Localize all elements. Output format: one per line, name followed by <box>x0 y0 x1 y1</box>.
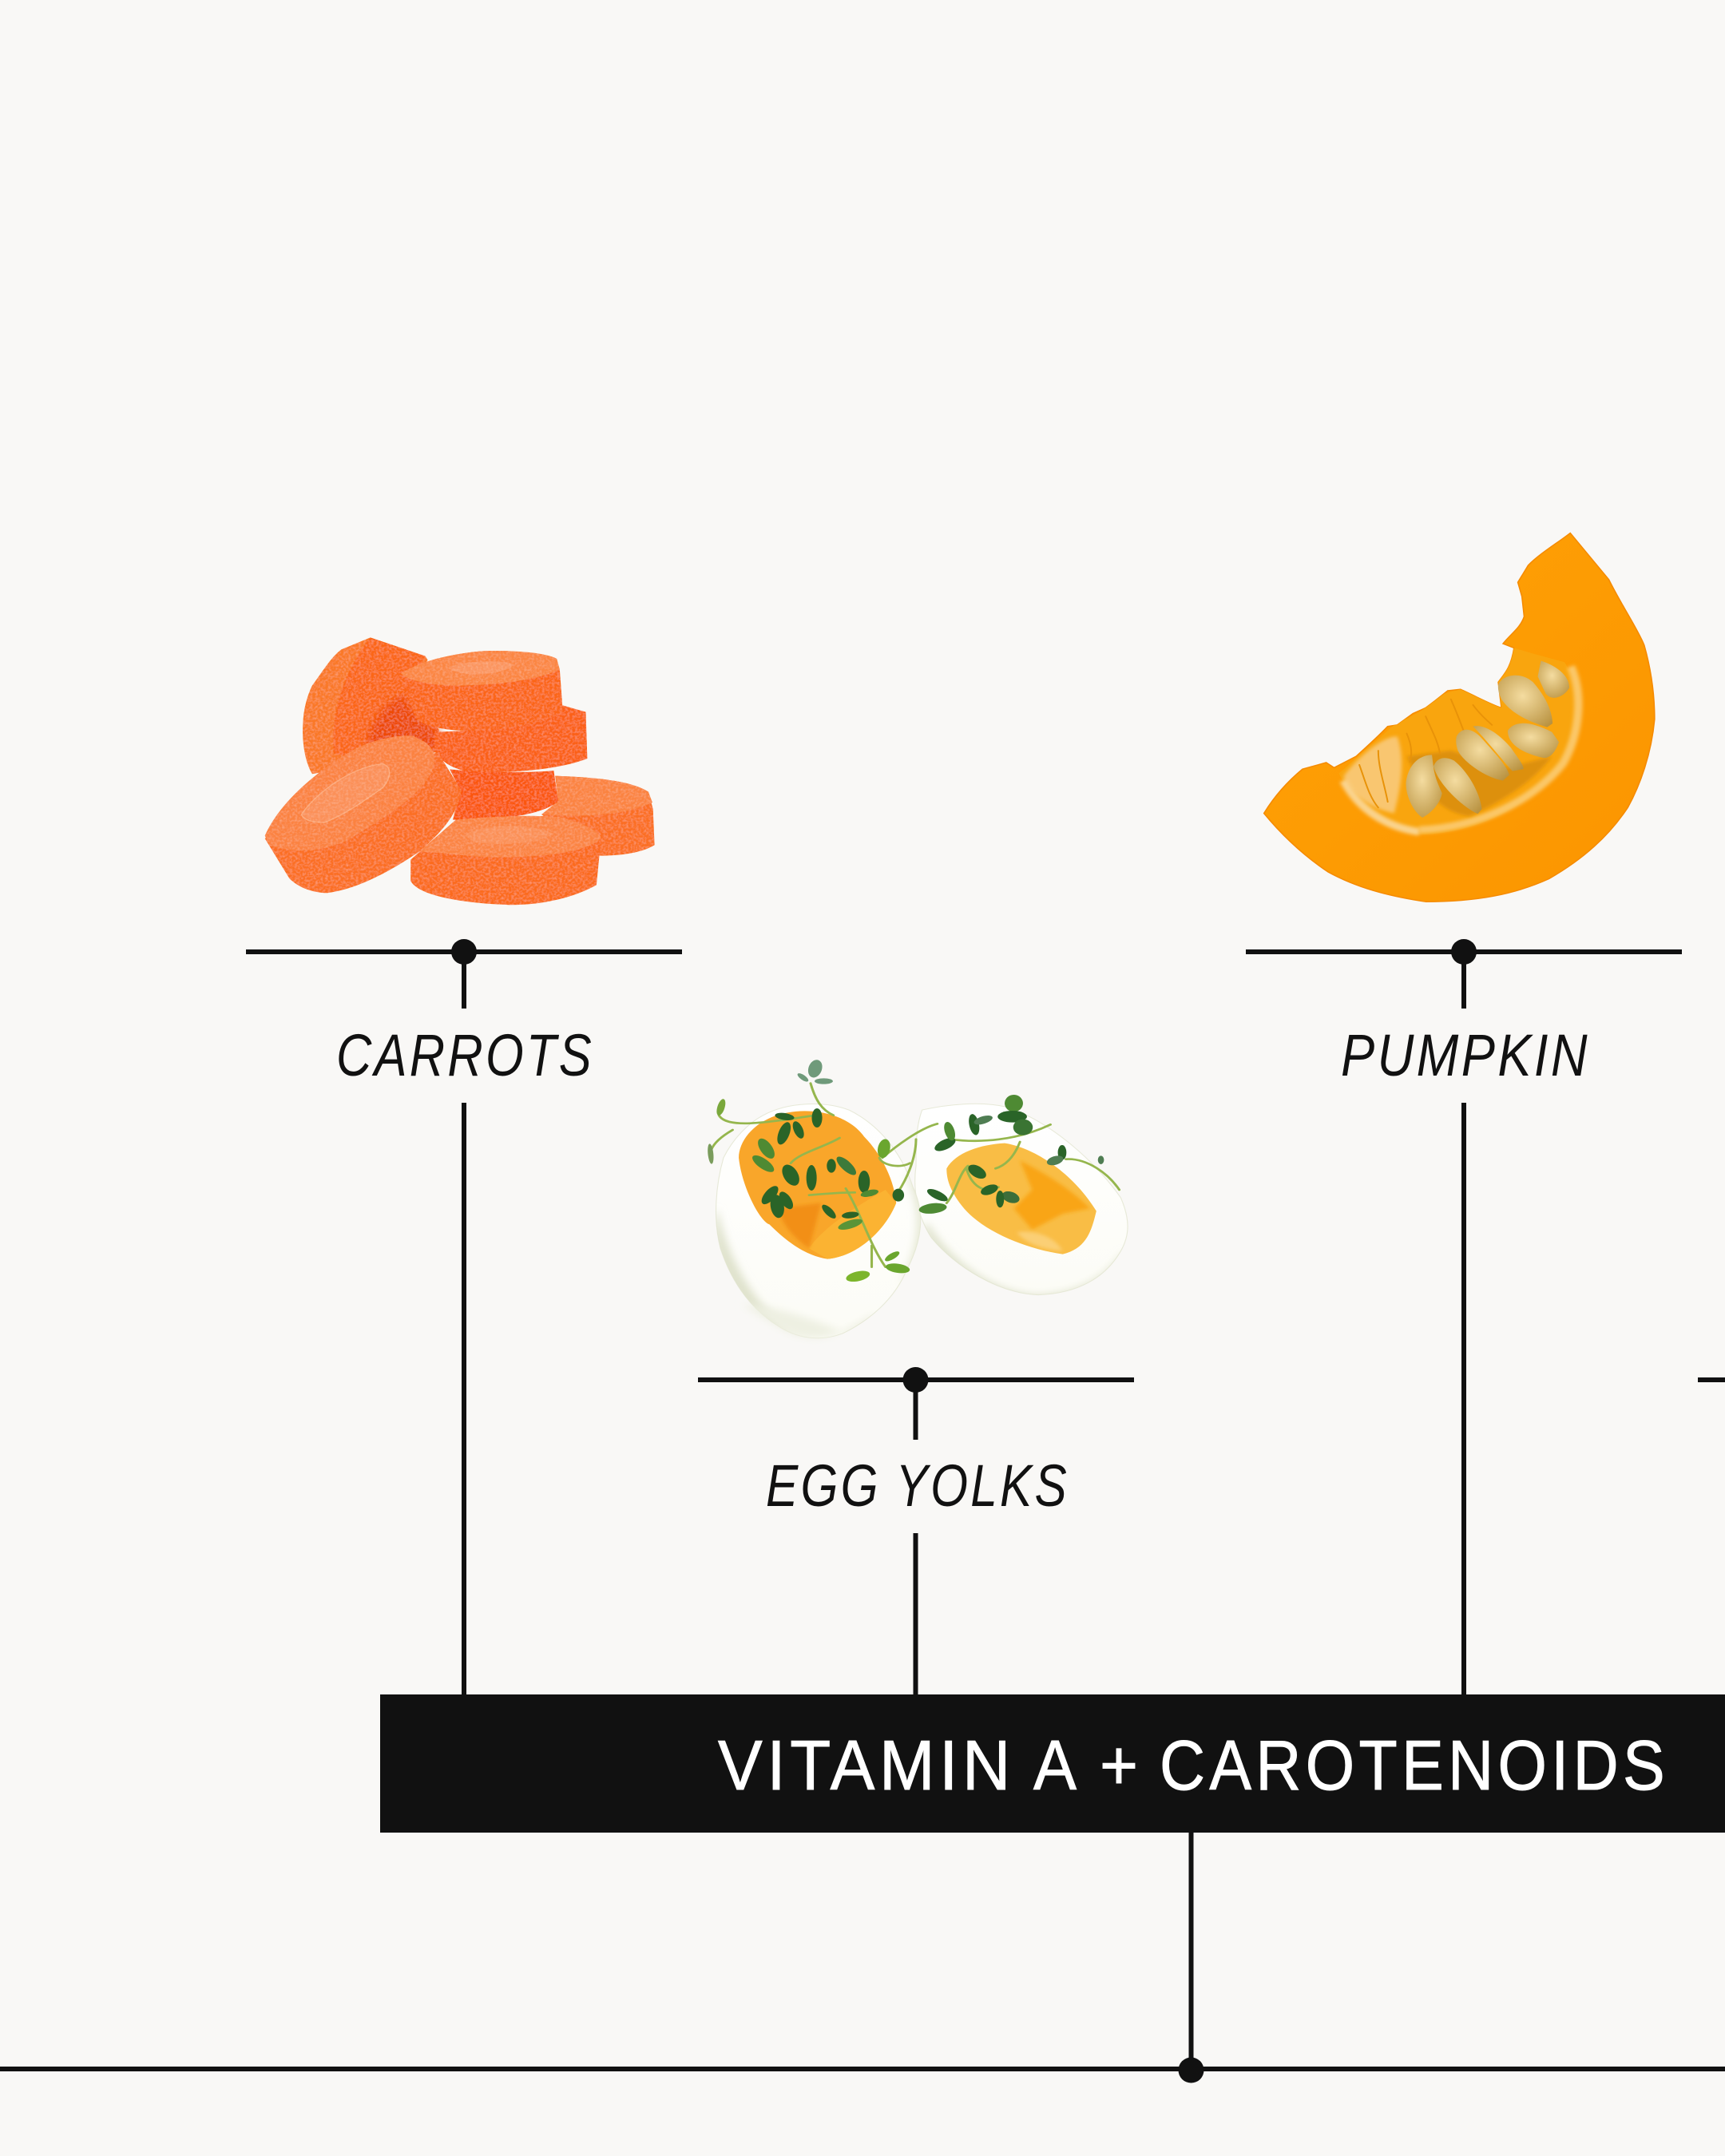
heading text: CAROTENOIDS <box>1160 1726 1669 1805</box>
egg yolks connector <box>698 1367 1134 1694</box>
icon: carrots <box>265 637 655 905</box>
icon: egg yolks <box>707 1058 1128 1338</box>
top slice <box>401 651 563 731</box>
seeds <box>1406 660 1569 818</box>
third slice <box>450 769 558 820</box>
bar connector to baseline <box>0 1833 1725 2083</box>
second slice <box>434 705 587 772</box>
heading text: A <box>1033 1726 1077 1805</box>
label: pumpkin: PUMPKIN <box>1341 1022 1590 1088</box>
heading text: + <box>1100 1726 1138 1805</box>
carrots connector <box>246 939 682 1694</box>
right egg <box>915 1104 1128 1304</box>
sprout stems <box>712 1084 1120 1267</box>
infographic canvas <box>0 532 1725 2083</box>
heading bar <box>380 1694 1725 1833</box>
front slice <box>265 735 462 893</box>
icon: pumpkin <box>1264 533 1655 902</box>
pulp fibres <box>1359 700 1492 807</box>
right slice <box>541 776 655 856</box>
heading text <box>718 1726 1669 1805</box>
pumpkin connector <box>1246 939 1682 1694</box>
bottom slice <box>410 816 601 905</box>
flesh <box>1264 533 1655 902</box>
partial connector at right edge <box>1698 1377 1725 1382</box>
heading text: VITAMIN <box>718 1726 1015 1805</box>
cavity <box>1338 648 1578 834</box>
sprout leaves <box>707 1058 1104 1284</box>
left egg <box>714 1104 928 1338</box>
label: egg yolks: EGG YOLKS <box>766 1453 1069 1519</box>
back slice <box>303 637 439 774</box>
label: carrots: CARROTS <box>336 1022 594 1088</box>
